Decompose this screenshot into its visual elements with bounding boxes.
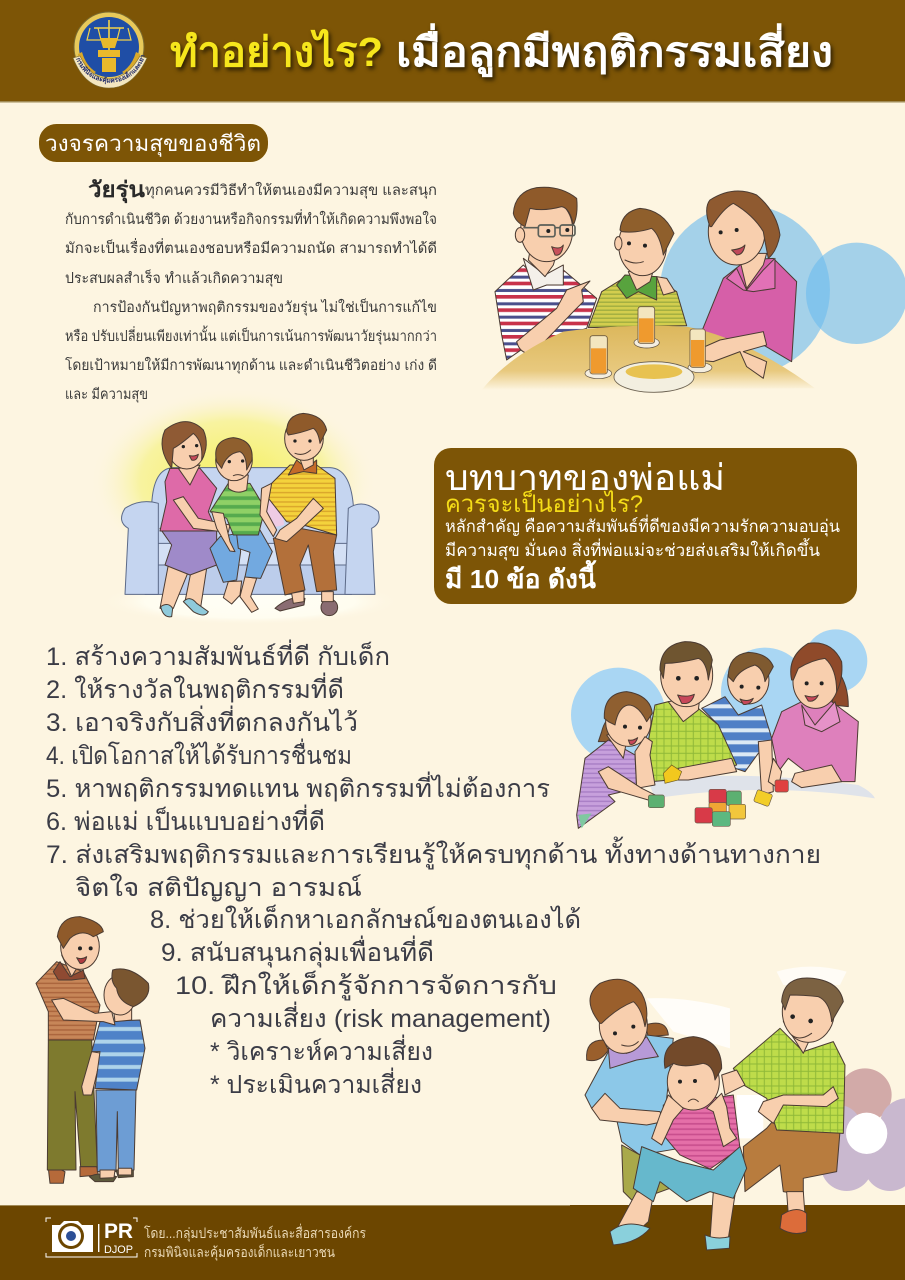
numbered list: ten roles: 4. เปิดโอกาสให้ได้รับการชื่นชม xyxy=(46,738,352,770)
text block: intro paragraphs: วัยรุ่น xyxy=(88,177,145,204)
sofa xyxy=(122,468,379,594)
girl in purple shirt xyxy=(577,692,655,828)
yellow glow xyxy=(90,388,377,575)
father xyxy=(36,917,103,1183)
text block: intro paragraphs: ประสบผลสำเร็จ ทำแล้วเกิดความสุข xyxy=(65,268,283,287)
numbered list: ten roles: ความเสี่ยง (risk management) xyxy=(210,1001,551,1033)
illustration: family talking at table xyxy=(482,187,905,392)
boy in striped shirt xyxy=(702,652,773,795)
boy xyxy=(210,438,272,612)
footer credit text xyxy=(144,1224,366,1261)
text block: intro paragraphs: หรือ ปรับเปลี่ยนเพียงเท่านั้น แต่เป็นการเน้นการพัฒนาวัยรุ่นมากกว่า xyxy=(65,325,437,345)
header band xyxy=(0,0,905,102)
numbered list: ten roles: 5. หาพฤติกรรมทดแทน พฤติกรรมที่ไม่ต้องการ xyxy=(46,771,550,803)
footer credit text: กรมพินิจและคุ้มครองเด็กและเยาวชน xyxy=(144,1243,335,1261)
text block: intro paragraphs xyxy=(65,177,437,403)
table shadow xyxy=(648,776,875,798)
numbered list: ten roles: 2. ให้รางวัลในพฤติกรรมที่ดี xyxy=(46,672,344,704)
blue circles xyxy=(571,629,867,762)
mother in pink shirt xyxy=(702,191,797,362)
son with olive polo xyxy=(588,208,687,328)
numbered list: ten roles: จิตใจ สติปัญญา อารมณ์ xyxy=(75,873,362,902)
numbered list: ten roles xyxy=(46,639,821,1099)
text block: intro paragraphs: มักจะเป็นเรื่องที่ตนเองชอบหรือมีความถนัด สามารถทำได้ดี xyxy=(65,238,437,257)
heading pill: cycle of happiness xyxy=(38,124,268,162)
title: ทำอย่างไร? xyxy=(170,28,383,75)
panel: parents' role xyxy=(434,448,857,604)
footer band xyxy=(0,1205,905,1280)
sad child in pink shirt xyxy=(610,1037,747,1250)
text block: intro paragraphs: กับการดำเนินชีวิต ด้วยงานหรือกิจกรรมที่ทำให้เกิดความพึงพอใจ xyxy=(65,209,437,228)
numbered list: ten roles: * วิเคราะห์ความเสี่ยง xyxy=(210,1034,433,1066)
numbered list: ten roles: 8. ช่วยให้เด็กหาเอกลักษณ์ของตนเองได้ xyxy=(150,904,581,934)
footer logo: PR DJOP: DJOP xyxy=(104,1244,133,1256)
footer logo: PR DJOP xyxy=(46,1218,137,1257)
flower backdrop xyxy=(647,967,905,1191)
text block: intro paragraphs: และ มีความสุข xyxy=(65,386,148,403)
title xyxy=(170,23,833,78)
mother with ponytail xyxy=(768,643,858,788)
numbered list: ten roles: 9. สนับสนุนกลุ่มเพื่อนที่ดี xyxy=(161,935,434,968)
illustration: father and son standing xyxy=(36,917,149,1183)
numbered list: ten roles: 1. สร้างความสัมพันธ์ที่ดี กับเด็ก xyxy=(46,639,390,671)
subheading: how should it be: ควรจะเป็นอย่างไร? xyxy=(445,489,643,518)
mother in blue shirt xyxy=(585,979,680,1202)
ten items note: มี 10 ข้อ ดังนี้ xyxy=(445,559,597,594)
father in green check shirt xyxy=(645,642,737,783)
title: เมื่อลูกมีพฤติกรรมเสี่ยง xyxy=(396,23,833,78)
toy blocks xyxy=(648,780,788,826)
father with striped shirt xyxy=(495,187,597,360)
text block: intro paragraphs: ทุกคนควรมีวิธีทำให้ตนเองมีความสุข และสนุก xyxy=(145,181,437,199)
footer logo: PR DJOP: PR xyxy=(104,1220,133,1243)
text block: intro paragraphs: โดยเป้าหมายให้มีการพัฒนาทุกด้าน และดำเนินชีวิตอย่าง เก่ง ดี xyxy=(65,356,437,374)
numbered list: ten roles: 3. เอาจริงกับสิ่งที่ตกลงกันไว้ xyxy=(46,705,358,737)
illustration: family on sofa xyxy=(90,388,400,625)
father in green shirt xyxy=(722,978,845,1234)
son seen from behind xyxy=(82,969,149,1182)
mother xyxy=(160,422,230,617)
numbered list: ten roles: 10. ฝึกให้เด็กรู้จักการจัดการกับ xyxy=(175,970,557,1001)
numbered list: ten roles: * ประเมินความเสี่ยง xyxy=(210,1067,422,1099)
description: หลักสำคัญ คือความสัมพันธ์ที่ดีของมีความรักความอบอุ่น xyxy=(445,514,840,537)
icon: department seal xyxy=(72,12,148,88)
father's arm on shoulder xyxy=(52,998,115,1025)
illustration: family with toy blocks xyxy=(571,629,875,828)
illustration: parents comforting sad child xyxy=(585,967,905,1250)
numbered list: ten roles: 6. พ่อแม่ เป็นแบบอย่างที่ดี xyxy=(46,804,325,836)
heading: parents' role: บทบาทของพ่อแม่ xyxy=(445,457,725,498)
description: มีความสุข มั่นคง สิ่งที่พ่อแม่จะช่วยส่งเสริมให้เกิดขึ้น xyxy=(445,538,820,561)
father xyxy=(260,413,338,616)
description xyxy=(445,514,840,561)
numbered list: ten roles: 7. ส่งเสริมพฤติกรรมและการเรียนรู้ให้ครบทุกด้าน ทั้งทางด้านทางกาย xyxy=(46,836,821,870)
footer credit text: โดย...กลุ่มประชาสัมพันธ์และสื่อสารองค์กร xyxy=(144,1224,366,1242)
heading pill: cycle of happiness: วงจรความสุขของชีวิต xyxy=(45,131,261,157)
text block: intro paragraphs: การป้องกันปัญหาพฤติกรรมของวัยรุ่น ไม่ใช่เป็นการแก้ไข xyxy=(93,297,437,316)
blue circles xyxy=(660,205,905,375)
table with drinks and snack plate xyxy=(482,307,815,392)
